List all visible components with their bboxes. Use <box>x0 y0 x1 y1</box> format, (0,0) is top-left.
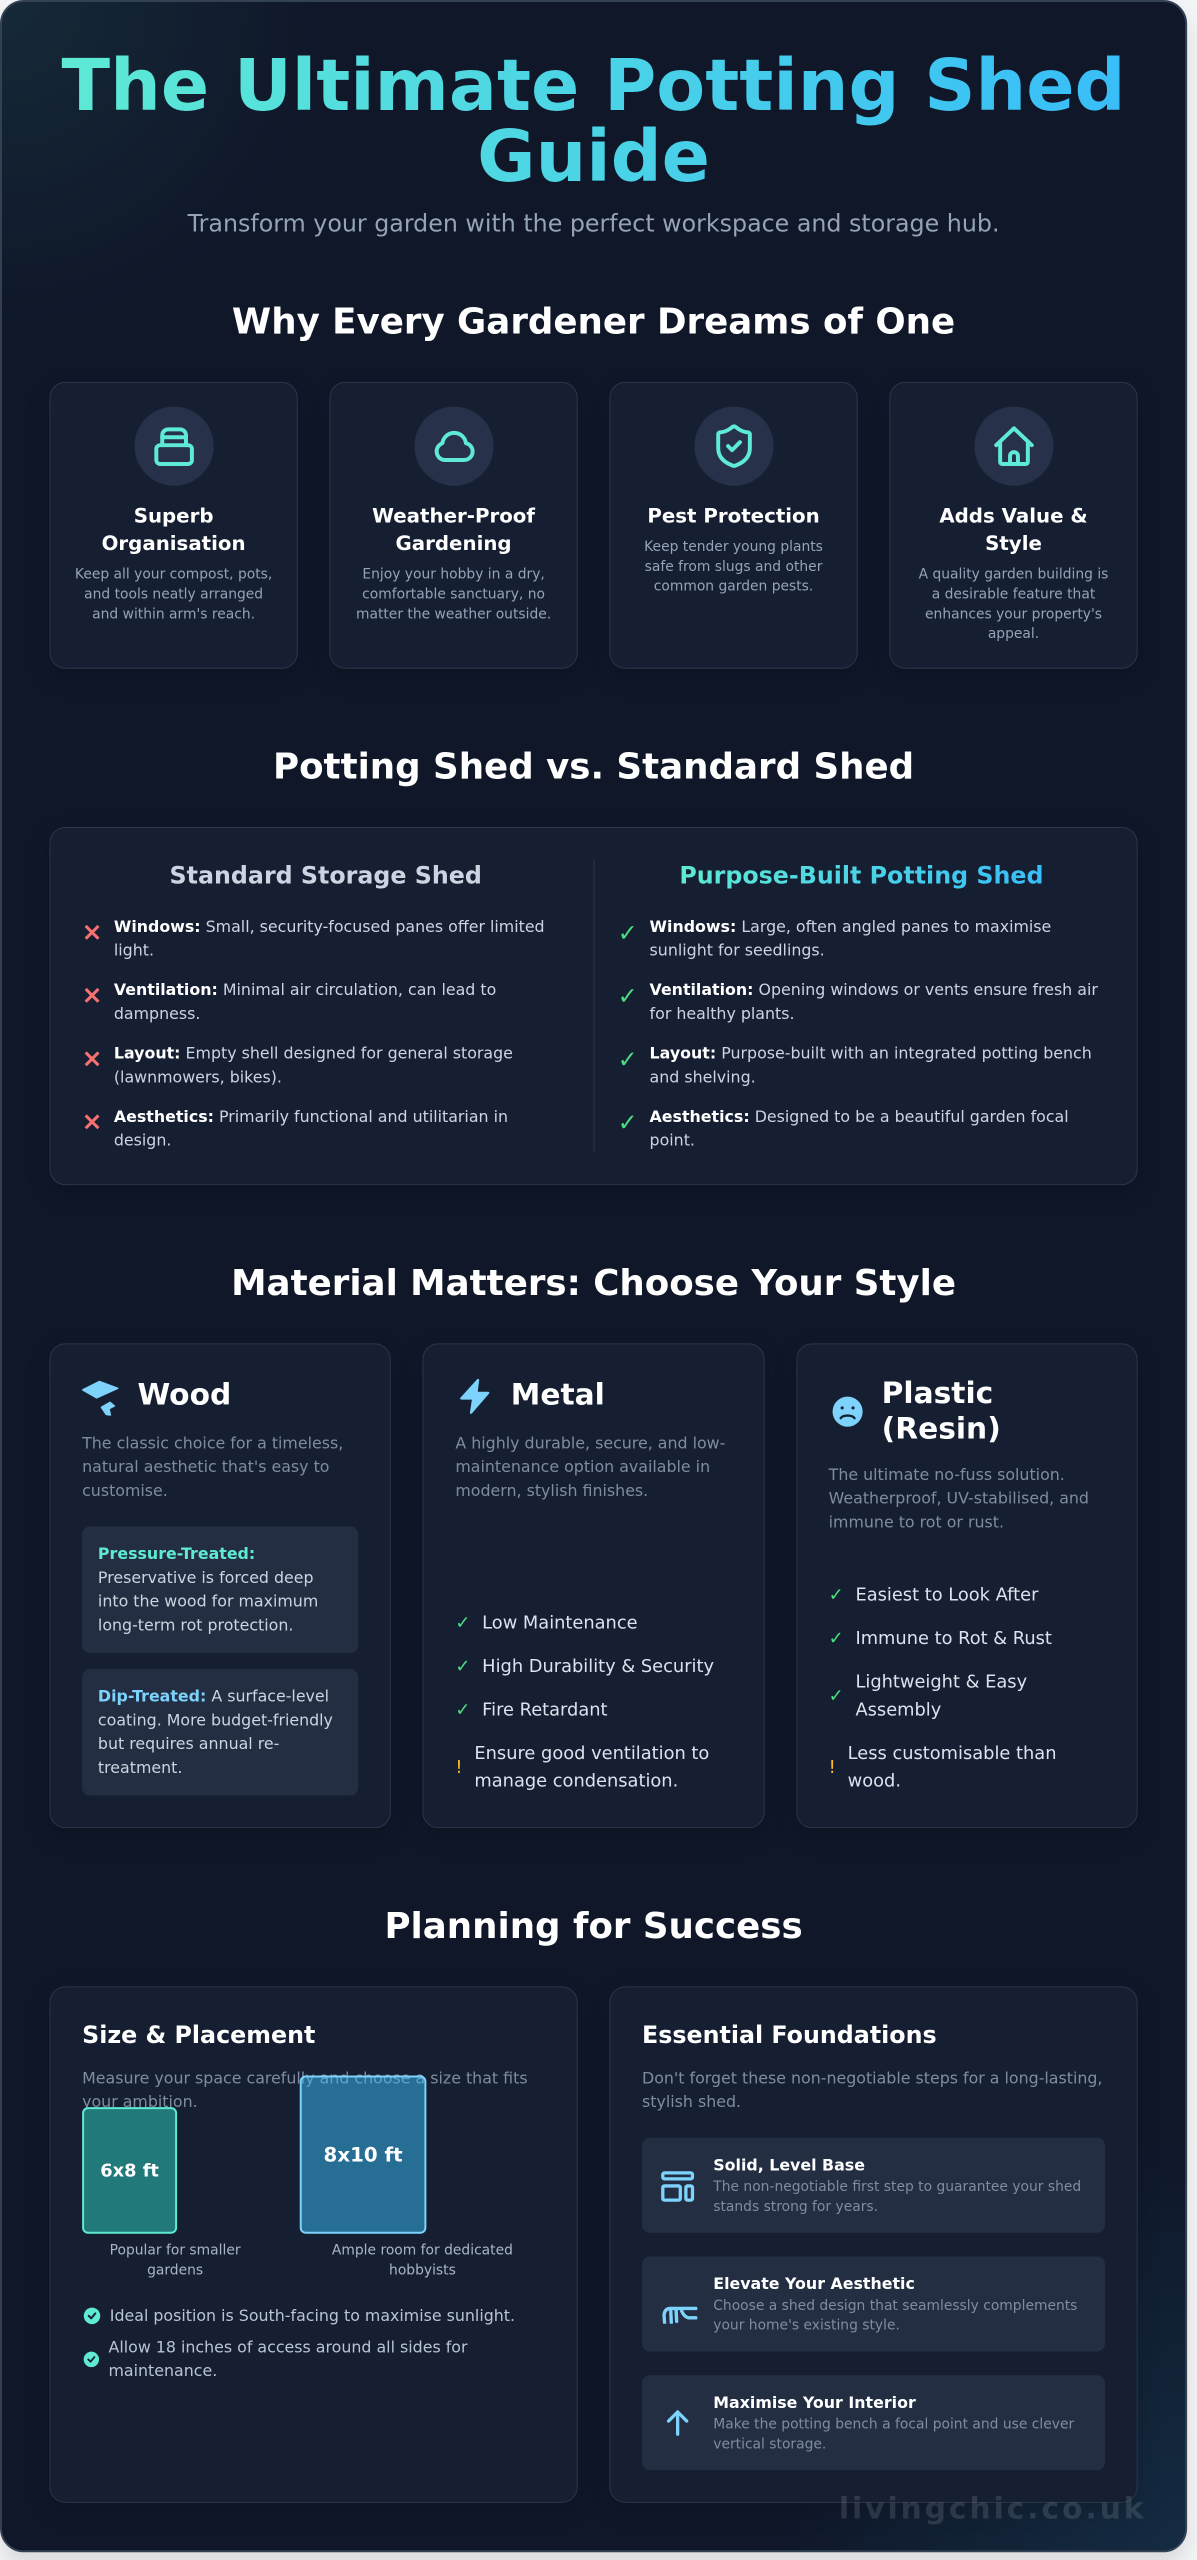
row: aesthetics: Aesthetics: Designed to be a beautiful garden focal <box>650 1107 1069 1126</box>
row: aesthetics: ✕ <box>82 1109 102 1137</box>
row: aesthetics: design. <box>114 1131 171 1150</box>
row: ventilation: Ventilation: Minimal air circulation, can lead to <box>114 980 496 999</box>
heading: comparison: Potting Shed vs. Standard Shed <box>273 747 914 787</box>
panel text <box>642 2069 1102 2111</box>
row: windows <box>82 917 545 960</box>
placement tips: Allow 18 inches of access around all sides for <box>109 2338 467 2357</box>
panel title: Size & Placement <box>82 2021 315 2049</box>
card text <box>644 539 823 595</box>
title: Guide <box>477 115 710 198</box>
row: windows: Windows: Large, often angled panes to maximise <box>650 917 1051 936</box>
callout: pressure-treated: long-term rot protection. <box>98 1615 293 1634</box>
metal feature list: Fire Retardant <box>482 1700 608 1720</box>
metal feature list: manage condensation. <box>474 1771 678 1792</box>
heading: materials: Material Matters: Choose Your Style <box>231 1263 956 1304</box>
plastic feature list: Assembly <box>855 1700 941 1720</box>
row: ventilation: ✕ <box>82 982 102 1010</box>
card title: Adds Value & <box>939 504 1088 527</box>
metal feature list: High Durability & Security <box>482 1656 714 1677</box>
shed size: 6x8: 6x8 ft <box>100 2160 159 2181</box>
icon: cloud <box>414 407 493 486</box>
column: standard shed <box>82 862 545 1150</box>
card title <box>372 504 536 555</box>
icon: arrow up <box>666 2410 688 2436</box>
caption: 6x8 <box>110 2243 241 2279</box>
card title: Gardening <box>396 531 512 555</box>
heading: planning: Planning for Success <box>384 1906 803 1947</box>
callout: pressure-treated: into the wood for maximum <box>98 1592 318 1611</box>
row: windows: ✓ <box>618 919 638 947</box>
item text: Maximise Your Interior <box>713 2393 916 2412</box>
row: ventilation <box>82 980 496 1023</box>
card text: Keep tender young plants <box>644 539 823 555</box>
plastic header <box>832 1376 1001 1446</box>
plastic feature list: Lightweight & Easy <box>855 1672 1027 1693</box>
item text <box>713 2156 1081 2215</box>
row: aesthetics: Aesthetics: Primarily functional and utilitarian in <box>114 1107 508 1126</box>
plastic feature list: Less customisable than <box>848 1743 1056 1764</box>
card title: Pest Protection <box>647 504 820 527</box>
metal feature list: ✓ <box>455 1656 470 1677</box>
card text: appeal. <box>988 626 1039 642</box>
item text: The non-negotiable first step to guarantee your shed <box>713 2179 1081 2195</box>
icon: shield check <box>694 407 773 486</box>
row: ventilation <box>618 980 1098 1023</box>
row: windows: ✕ <box>82 919 102 947</box>
card text: matter the weather outside. <box>356 606 551 622</box>
plastic description: The ultimate no-fuss solution. <box>829 1465 1065 1484</box>
panel: comparison <box>49 827 1138 1185</box>
plastic feature list: ! <box>829 1757 836 1778</box>
card title: Weather-Proof <box>372 504 535 527</box>
panel text <box>82 2069 528 2111</box>
row: layout: (lawnmowers, bikes). <box>114 1067 282 1086</box>
metal description: A highly durable, secure, and low- <box>455 1433 725 1452</box>
item: solid base <box>642 2138 1105 2233</box>
caption: 6x8: Popular for smaller <box>110 2243 241 2259</box>
row: layout <box>618 1044 1092 1086</box>
callout: dip-treated: treatment. <box>98 1758 182 1777</box>
panel: wood <box>49 1343 391 1828</box>
callout: dip-treated: but requires annual re- <box>98 1734 279 1753</box>
column heading: Purpose-Built Potting Shed <box>679 862 1043 889</box>
row: aesthetics <box>82 1107 508 1150</box>
panel text: Measure your space carefully and choose a size that fits <box>82 2069 528 2087</box>
plastic description <box>828 1465 1089 1531</box>
item text: your home's existing style. <box>713 2318 900 2334</box>
card text: common garden pests. <box>654 579 813 595</box>
plastic feature list <box>829 1585 1056 1792</box>
wood description: customise. <box>82 1481 168 1500</box>
metal feature list <box>455 1612 714 1792</box>
metal feature list: Low Maintenance <box>482 1612 638 1633</box>
card text: comfortable sanctuary, no <box>362 587 545 602</box>
wood header <box>82 1378 231 1416</box>
caption: 8x10 <box>332 2243 513 2279</box>
shed size: 6x8 <box>82 2107 177 2234</box>
card text: safe from slugs and other <box>645 559 822 575</box>
metal description: maintenance option available in <box>455 1457 710 1476</box>
metal header <box>460 1378 605 1414</box>
card title <box>939 504 1088 555</box>
metal header: Metal <box>511 1378 605 1413</box>
row: aesthetics: ✓ <box>618 1109 638 1137</box>
item text: Choose a shed design that seamlessly complements <box>713 2298 1077 2314</box>
wood description: natural aesthetic that's easy to <box>82 1457 329 1476</box>
item: maximise interior <box>642 2375 1105 2470</box>
panel: essential foundations <box>609 1986 1138 2503</box>
panel: pest protection <box>609 382 858 669</box>
item text <box>713 2274 1077 2334</box>
card text <box>75 567 272 622</box>
row: aesthetics <box>618 1107 1069 1150</box>
panel: plastic <box>796 1343 1138 1828</box>
item text: Solid, Level Base <box>713 2156 865 2174</box>
callout: dip-treated: coating. More budget-friendly <box>98 1710 333 1729</box>
subtitle: Transform your garden with the perfect workspace and storage hub. <box>188 210 999 237</box>
plastic feature list: wood. <box>848 1771 901 1792</box>
plastic header: (Resin) <box>882 1412 1001 1446</box>
callout: dip-treated: Dip-Treated: A surface-level <box>98 1687 329 1705</box>
panel text: stylish shed. <box>642 2092 741 2111</box>
column heading: Standard Storage Shed <box>170 862 482 889</box>
item text: vertical storage. <box>713 2437 826 2452</box>
card title: Organisation <box>102 531 246 555</box>
item text: Elevate Your Aesthetic <box>713 2274 915 2293</box>
shed size: 8x10 <box>300 2075 426 2234</box>
icon: hand <box>662 2306 698 2324</box>
card text: enhances your property's <box>925 606 1102 622</box>
callout: pressure-treated: Preservative is forced deep <box>98 1568 314 1587</box>
column: potting shed <box>618 862 1098 1150</box>
row: layout: and shelving. <box>650 1067 756 1086</box>
icon: layout <box>661 2171 694 2202</box>
panel title: Essential Foundations <box>642 2021 937 2049</box>
card title: Superb <box>134 504 214 527</box>
plastic feature list: Easiest to Look After <box>855 1585 1038 1606</box>
row: ventilation: ✓ <box>618 982 638 1010</box>
plastic header: Plastic <box>882 1376 993 1411</box>
item: elevate aesthetic <box>642 2257 1105 2351</box>
metal description: modern, stylish finishes. <box>455 1481 648 1500</box>
wood header: Wood <box>138 1378 231 1413</box>
card title <box>102 504 246 555</box>
caption: 8x10: hobbyists <box>389 2263 456 2279</box>
card text <box>918 567 1108 642</box>
card text: and tools neatly arranged <box>84 587 263 602</box>
metal feature list: ! <box>455 1757 463 1778</box>
caption: 8x10: Ample room for dedicated <box>332 2243 513 2259</box>
placement tips: maintenance. <box>109 2362 217 2381</box>
caption: 6x8: gardens <box>147 2263 203 2279</box>
row: layout <box>82 1044 513 1086</box>
panel: size and placement <box>49 1986 578 2503</box>
row: ventilation: dampness. <box>114 1004 200 1023</box>
metal feature list: ✓ <box>455 1700 470 1720</box>
plastic description: Weatherproof, UV-stabilised, and <box>829 1489 1089 1508</box>
row: layout: ✓ <box>618 1046 638 1073</box>
wood description <box>82 1433 343 1500</box>
card text: a desirable feature that <box>932 587 1095 602</box>
row: layout: Layout: Purpose-built with an integrated potting bench <box>650 1044 1092 1062</box>
wood description: The classic choice for a timeless, <box>82 1433 343 1452</box>
shed size: 8x10: 8x10 ft <box>324 2143 403 2166</box>
item text: Make the potting bench a focal point and use clever <box>713 2417 1074 2433</box>
title <box>49 49 1138 192</box>
plastic feature list: ✓ <box>829 1628 844 1649</box>
metal feature list: Ensure good ventilation to <box>474 1743 709 1764</box>
card title: Style <box>985 531 1042 555</box>
row: ventilation: Ventilation: Opening windows or vents ensure fresh air <box>650 980 1098 999</box>
panel: metal <box>423 1343 764 1828</box>
panel: weather-proof gardening <box>329 382 578 669</box>
title: The Ultimate Potting Shed <box>62 44 1126 127</box>
panel text: Don't forget these non-negotiable steps for a long-lasting, <box>642 2069 1102 2087</box>
callout: pressure-treated <box>82 1526 358 1653</box>
row: aesthetics: point. <box>650 1131 695 1150</box>
plastic description: immune to rot or rust. <box>829 1513 1004 1531</box>
card text: Keep all your compost, pots, <box>75 567 272 583</box>
card text: A quality garden building is <box>919 567 1108 583</box>
metal feature list: ✓ <box>455 1612 470 1633</box>
heading: why every gardener: Why Every Gardener Dreams of One <box>232 302 955 342</box>
panel: adds value and style <box>889 382 1138 669</box>
panel: superb organisation <box>49 382 298 669</box>
callout: pressure-treated: Pressure-Treated: <box>98 1544 255 1563</box>
row: windows <box>618 917 1051 960</box>
row: windows: Windows: Small, security-focused panes offer limited <box>114 917 545 936</box>
placement tips <box>84 2306 515 2381</box>
row: layout: ✕ <box>82 1046 102 1073</box>
plastic feature list: Immune to Rot & Rust <box>855 1628 1052 1649</box>
row: windows: light. <box>114 941 154 960</box>
plastic feature list: ✓ <box>829 1686 844 1706</box>
icon: house <box>974 407 1053 486</box>
callout: dip-treated <box>82 1669 358 1796</box>
card text: and within arm's reach. <box>92 606 255 622</box>
metal description <box>455 1433 725 1500</box>
icon: storage <box>134 407 213 486</box>
row: windows: sunlight for seedlings. <box>650 941 825 960</box>
row: ventilation: for healthy plants. <box>650 1004 795 1023</box>
item text: stands strong for years. <box>713 2199 878 2215</box>
placement tips: Ideal position is South-facing to maximise sunlight. <box>110 2306 515 2325</box>
watermark: livingchic.co.uk <box>839 2492 1147 2526</box>
row: layout: Layout: Empty shell designed for general storage <box>114 1044 513 1062</box>
panel text: your ambition. <box>82 2092 198 2111</box>
card text <box>356 567 551 622</box>
item text <box>713 2393 1074 2452</box>
plastic feature list: ✓ <box>829 1585 844 1606</box>
card text: Enjoy your hobby in a dry, <box>362 567 545 583</box>
